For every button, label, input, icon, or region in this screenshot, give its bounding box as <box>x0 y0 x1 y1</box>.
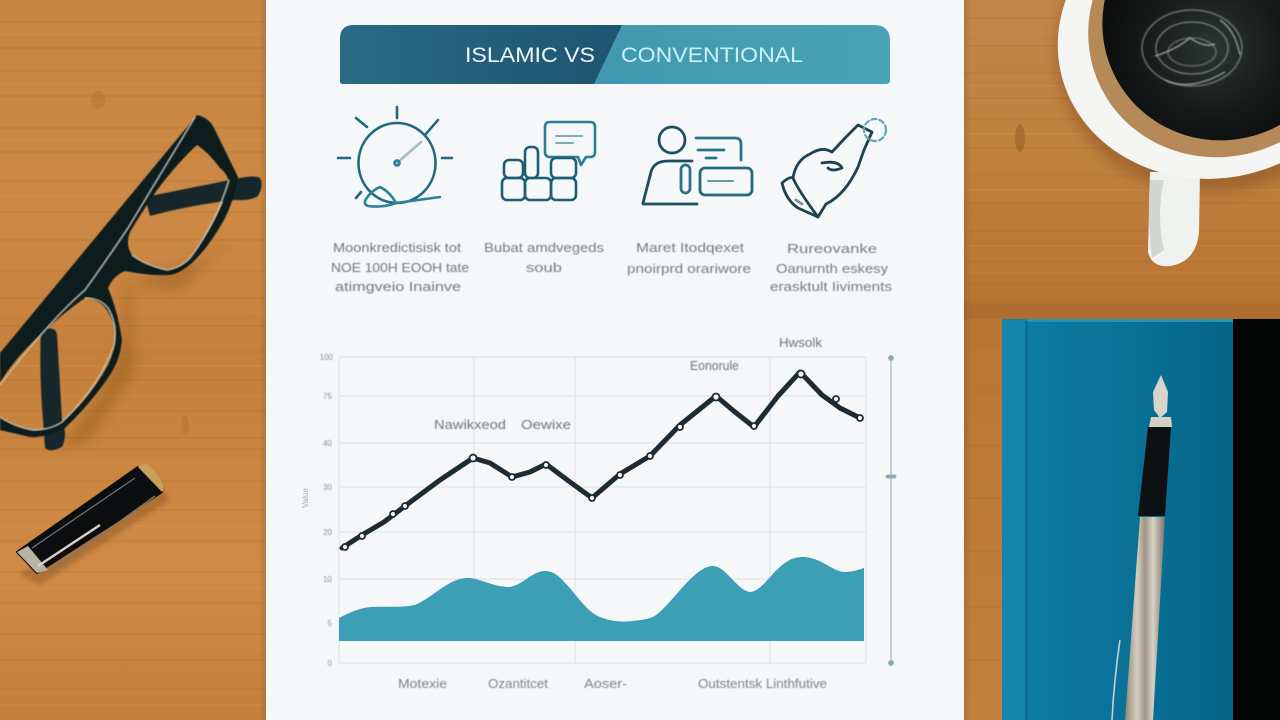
coffee surface <box>1063 0 1280 180</box>
chart x axis labels: Outstentsk Linthfutive <box>698 677 827 691</box>
y axis labels: 10 <box>323 575 333 584</box>
black line series <box>342 370 863 550</box>
y axis title: Value <box>301 488 310 508</box>
crema rim <box>1046 0 1280 201</box>
column 3 caption: Maret Itodqexet <box>636 241 745 255</box>
title banner <box>340 25 890 84</box>
chart x axis labels <box>398 677 827 691</box>
chart x axis labels: Ozantitcet <box>488 677 549 691</box>
icon: person with cards <box>643 127 752 204</box>
pen nib <box>1153 375 1168 418</box>
right scale axis <box>886 356 896 666</box>
title text: islamic vs: ISLAMIC VS <box>465 44 595 67</box>
chart callout labels: Eonorule <box>690 359 739 373</box>
column 4 caption: Oanurnth eskesy <box>776 262 889 276</box>
teal area series <box>339 557 864 641</box>
cup handle <box>1148 172 1200 266</box>
column 3 caption <box>627 241 751 276</box>
y axis labels <box>320 353 334 668</box>
chart callout labels: Hwsolk <box>779 336 823 350</box>
column 2 caption: soub <box>526 261 562 275</box>
paper sheet <box>262 0 968 720</box>
chart x axis labels: Aoser- <box>584 677 627 691</box>
frame <box>0 115 238 437</box>
chart <box>301 353 896 668</box>
column 2 caption: Bubat amdvegeds <box>484 241 604 255</box>
fountain pen <box>1112 375 1172 720</box>
pen grip <box>1138 427 1171 516</box>
column 1 caption <box>331 241 469 294</box>
pen collar <box>1149 417 1172 427</box>
glasses <box>0 115 262 450</box>
lens rim highlights <box>0 117 229 430</box>
column 1 caption: NOE 100H EOOH tate <box>331 261 469 275</box>
cup body <box>1031 0 1280 208</box>
y axis labels: 75 <box>323 392 333 401</box>
chart callout labels: Nawikxeod <box>434 418 506 432</box>
column 4 caption: Rureovanke <box>787 242 877 256</box>
y axis labels: 40 <box>323 439 333 448</box>
icon: clock with rays <box>338 107 452 207</box>
y axis labels: 0 <box>328 659 333 668</box>
y axis labels: 5 <box>328 619 333 628</box>
pen barrel <box>1125 517 1165 720</box>
column 3 caption: pnoirprd orariwore <box>627 262 751 276</box>
y axis labels: 100 <box>320 353 334 362</box>
pen cap <box>17 464 170 585</box>
column 1 caption: atimgveio Inainve <box>335 280 461 294</box>
pen clip wire <box>1112 640 1120 720</box>
chart x axis labels: Motexie <box>398 677 447 691</box>
y axis labels: 30 <box>323 483 333 492</box>
coffee swirl <box>1142 10 1242 86</box>
chart callout labels: Oewixe <box>521 418 571 432</box>
icon: blocks and speech bubble <box>502 122 595 200</box>
title text: conventional: CONVENTIONAL <box>621 44 803 67</box>
chart callout labels <box>434 336 823 432</box>
grid lines <box>339 357 866 663</box>
column 4 caption <box>770 242 892 294</box>
y axis labels: 20 <box>323 528 333 537</box>
icon: hand holding <box>782 119 886 217</box>
column 2 caption <box>484 241 604 275</box>
coffee cup <box>1028 0 1280 266</box>
column 1 caption: Moonkredictisisk tot <box>333 241 462 255</box>
blue notebook <box>1002 319 1280 720</box>
temple arms <box>40 176 262 450</box>
column 4 caption: erasktult Iiviments <box>770 280 892 294</box>
